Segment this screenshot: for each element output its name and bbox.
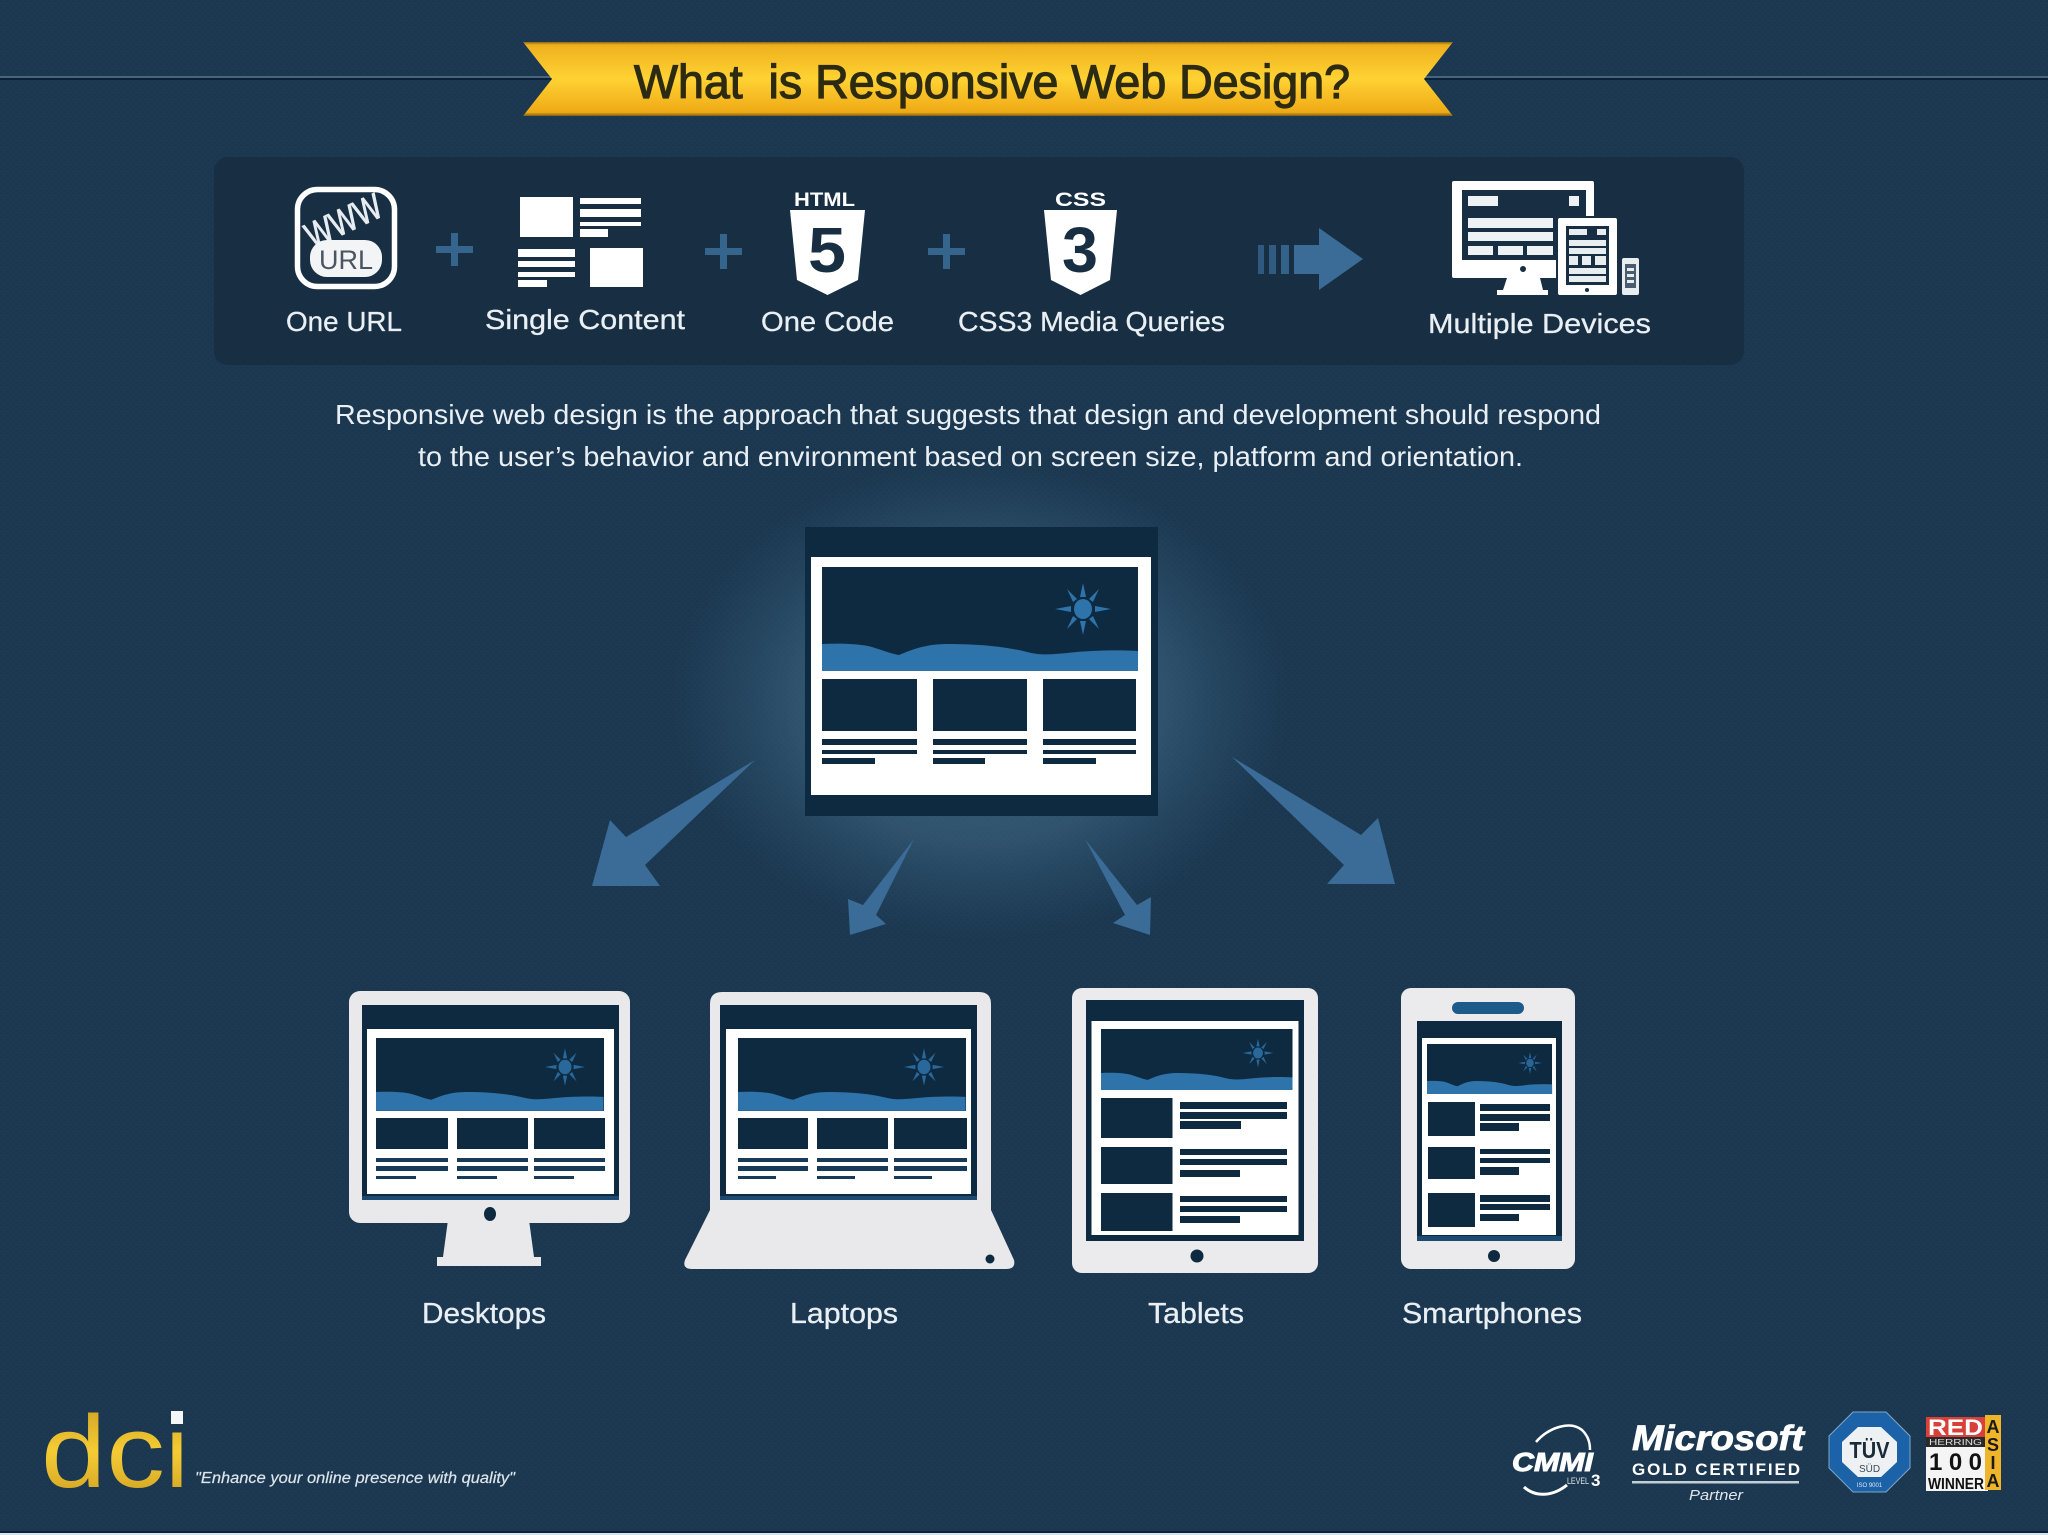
badge: Microsoft Gold Certified Partner: GOLD CERTIFIED	[1632, 1460, 1800, 1479]
label: One Code: One Code	[761, 306, 894, 337]
badge: Red Herring Asia 100 Winner: RED	[1928, 1415, 1983, 1440]
icon: one URL	[298, 185, 394, 286]
icon: one URL: WWW	[298, 185, 388, 256]
definition paragraph	[335, 399, 1601, 472]
arrow: to laptops	[848, 839, 914, 935]
badge: Microsoft Gold Certified Partner: Microsoft	[1632, 1419, 1805, 1458]
icon: HTML5 shield: 5	[808, 214, 846, 286]
panel: formula	[214, 157, 1744, 365]
tagline: "Enhance your online presence with quality"	[195, 1470, 517, 1487]
arrow: to tablets	[1085, 839, 1151, 935]
device: laptop	[684, 992, 1014, 1269]
arrow: result	[1258, 228, 1363, 290]
icon: plus	[928, 234, 965, 269]
badge: Red Herring Asia 100 Winner: A	[1986, 1417, 2000, 1437]
glow behind master layout	[670, 460, 1290, 940]
device: smartphone	[1401, 988, 1575, 1269]
icon: plus	[436, 233, 473, 266]
device: desktop	[349, 991, 630, 1266]
badge: TUV	[1829, 1412, 1910, 1492]
label: Multiple Devices: Multiple Devices	[1428, 308, 1651, 339]
label: Laptops: Laptops	[790, 1298, 898, 1330]
badge: Red Herring Asia 100 Winner: S	[1987, 1435, 1999, 1455]
label: One URL: One URL	[286, 306, 402, 337]
badge: TUV: TÜV	[1850, 1437, 1890, 1463]
icon: CSS3 shield	[1044, 190, 1117, 295]
label: Single Content: Single Content	[485, 304, 685, 335]
badge: TUV: ISO 9001	[1857, 1483, 1883, 1489]
icon: one URL: URL	[319, 245, 373, 275]
badge: CMMI: 3	[1591, 1471, 1600, 1490]
header rule	[0, 76, 2048, 80]
badge: Red Herring Asia 100 Winner: WINNER	[1928, 1476, 1984, 1493]
icon: multiple devices	[1452, 181, 1639, 297]
title banner	[523, 42, 1453, 116]
badge: Microsoft Gold Certified Partner: Partner	[1689, 1487, 1744, 1504]
icon: CSS3 shield: 3	[1062, 214, 1098, 286]
arrow: to smartphones	[1232, 757, 1395, 884]
badge: Red Herring Asia 100 Winner: I	[1990, 1453, 1996, 1473]
definition paragraph: to the user’s behavior and environment based on screen size, platform and orientation.	[418, 441, 1523, 472]
title text: What is Responsive Web Design?	[634, 55, 1350, 108]
badge: CMMI: LEVEL	[1567, 1476, 1589, 1486]
logo: dci: dc	[41, 1394, 165, 1509]
logo: dci: i	[166, 1394, 188, 1509]
definition paragraph: Responsive web design is the approach that suggests that design and development should respond	[335, 399, 1601, 430]
badge: Red Herring Asia 100 Winner: 100	[1929, 1449, 1982, 1476]
label: Smartphones: Smartphones	[1402, 1298, 1582, 1330]
icon: HTML5 shield: HTML	[794, 190, 855, 211]
icon: plus	[705, 234, 742, 269]
badge: TUV: SÜD	[1859, 1463, 1880, 1475]
badge: CMMI: CMMI	[1512, 1447, 1594, 1477]
badge: Red Herring Asia 100 Winner: HERRING	[1929, 1438, 1982, 1447]
label: Tablets: Tablets	[1148, 1298, 1244, 1330]
icon: single content	[518, 197, 643, 287]
icon: CSS3 shield: CSS	[1055, 190, 1106, 211]
device: tablet	[1072, 988, 1318, 1273]
badge: CMMI	[1512, 1426, 1600, 1494]
badge: Red Herring Asia 100 Winner: A	[1986, 1471, 2000, 1491]
label: Desktops: Desktops	[422, 1298, 546, 1330]
master web page layout	[805, 527, 1158, 816]
arrow: to desktops	[592, 760, 755, 886]
icon: HTML5 shield	[790, 190, 865, 295]
label: CSS3 Media Queries: CSS3 Media Queries	[958, 306, 1225, 337]
badge: Microsoft Gold Certified Partner	[1632, 1419, 1805, 1504]
badge: Red Herring Asia 100 Winner	[1926, 1415, 2001, 1493]
